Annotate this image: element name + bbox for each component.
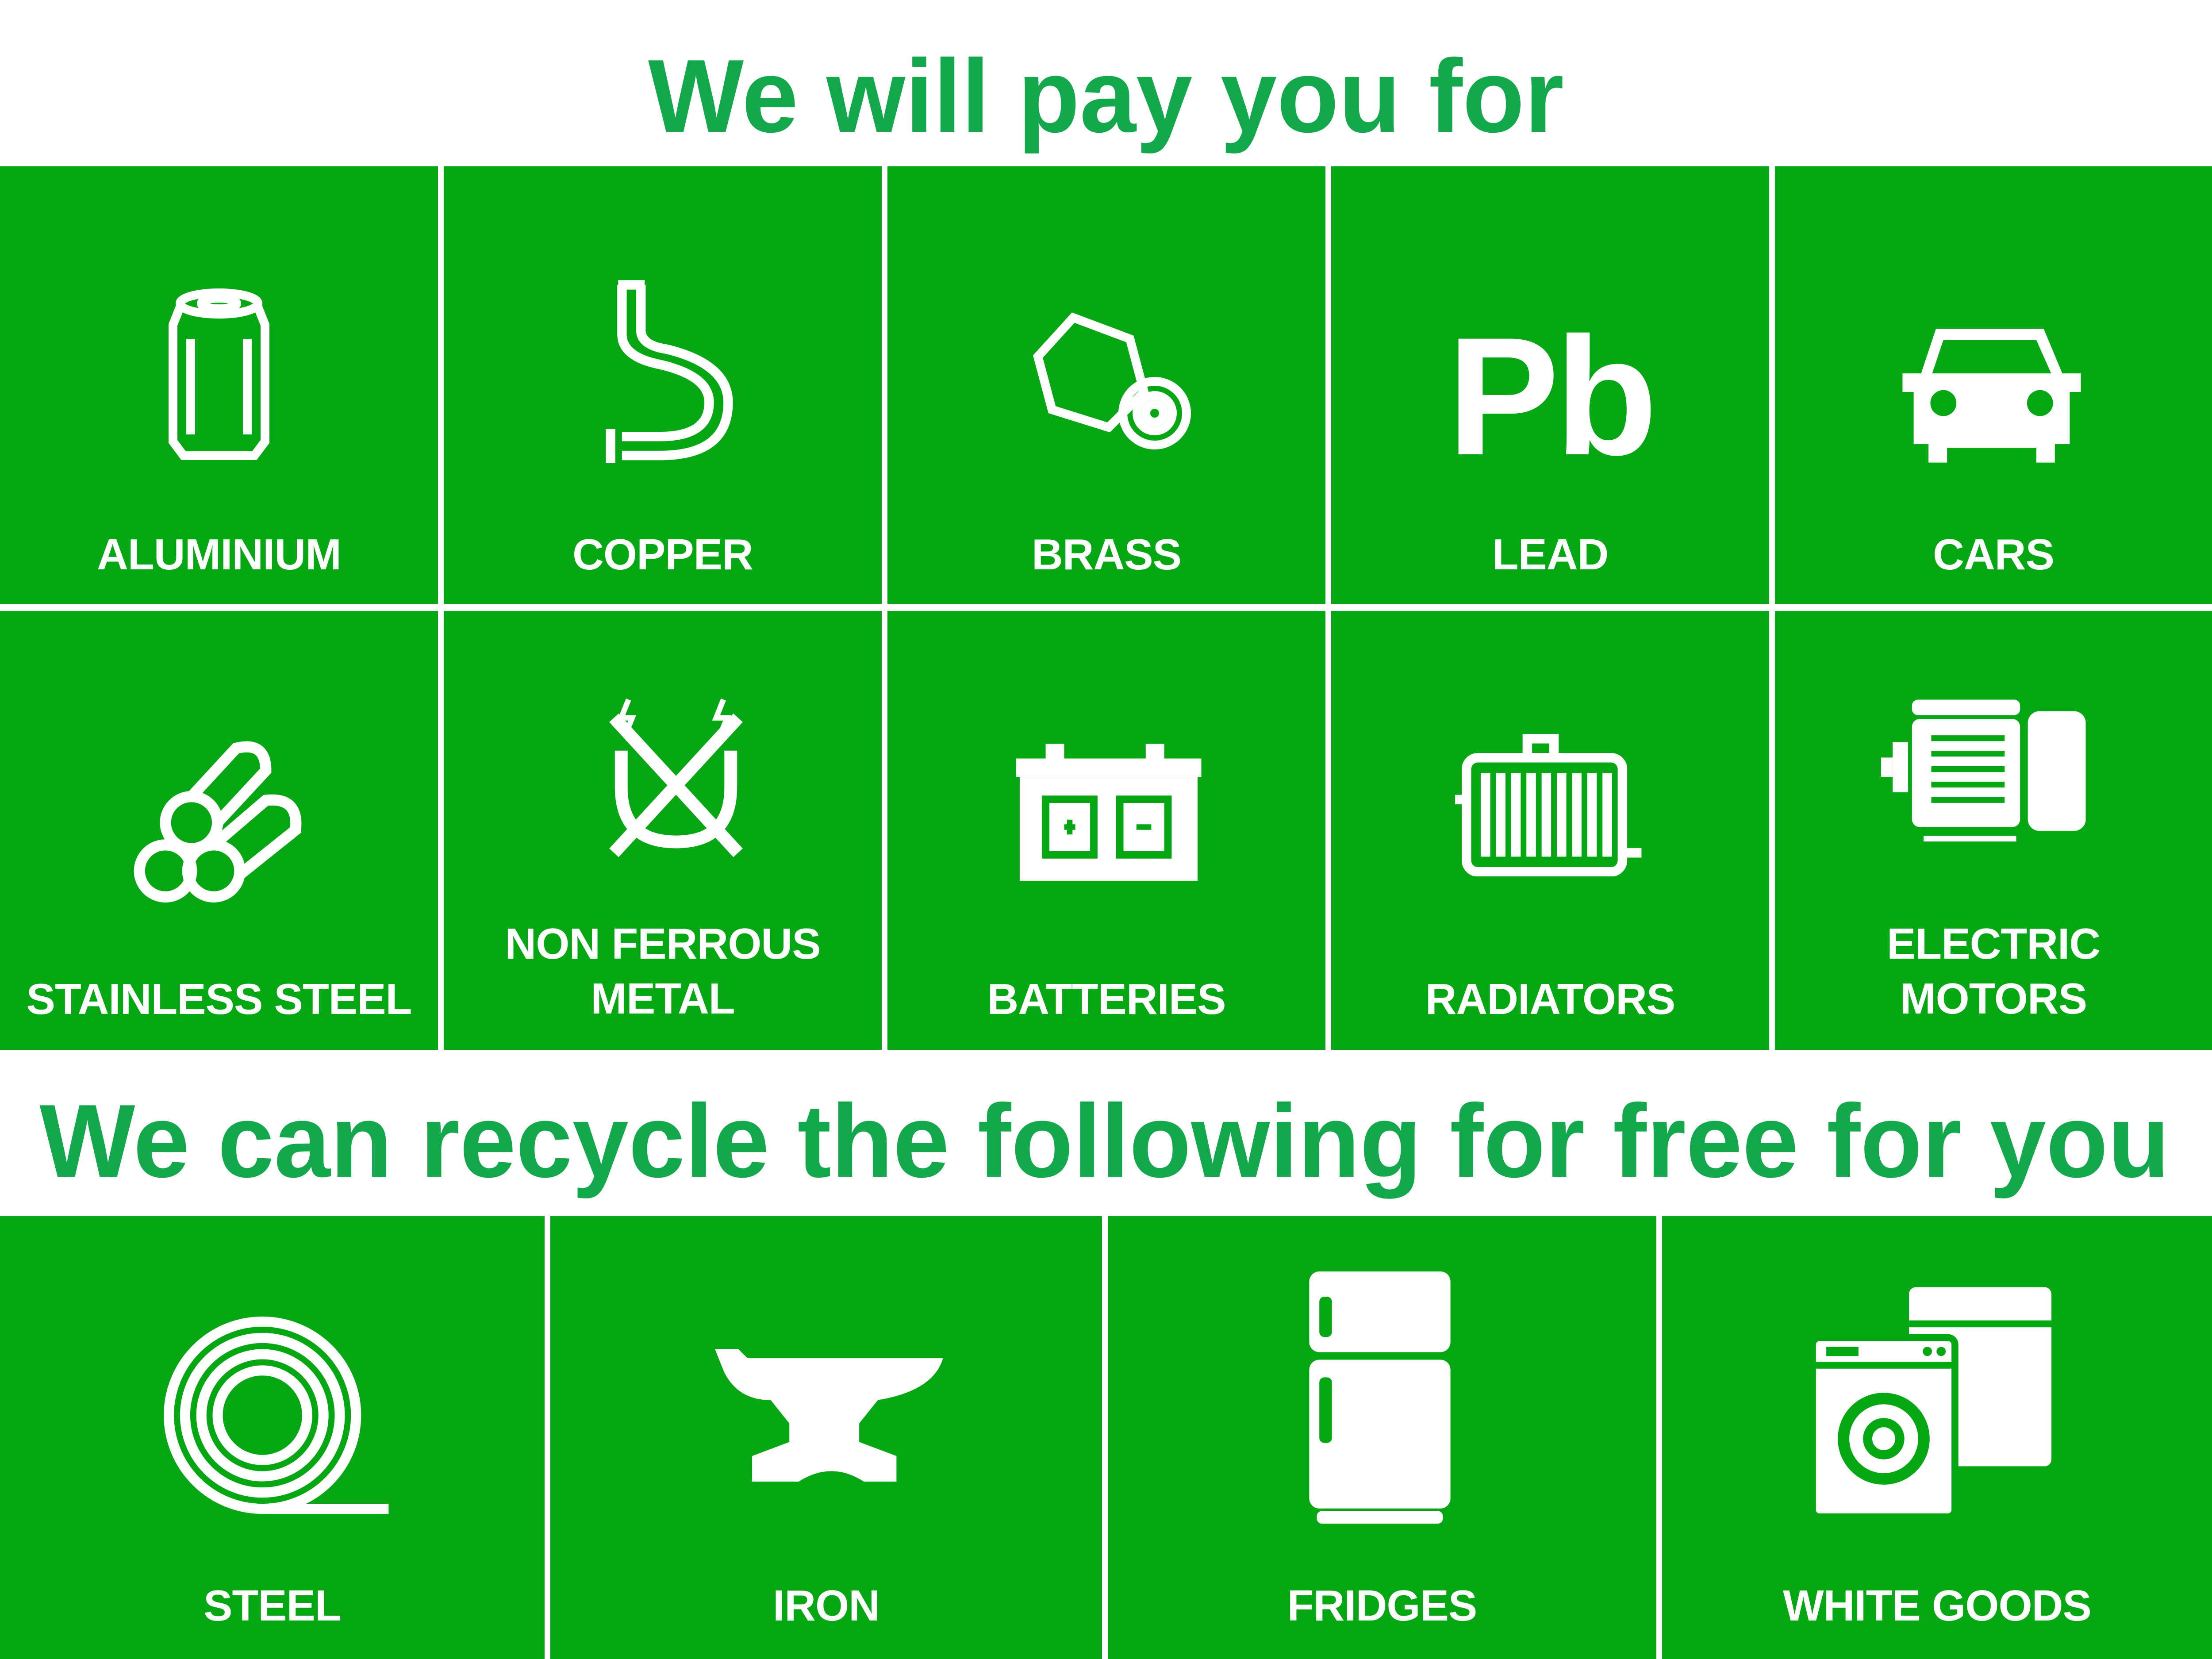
tile: electric motors: [1775, 611, 2212, 1050]
label: [1775, 916, 2212, 1026]
label: IRON: [773, 1581, 879, 1630]
icon: fitting: [1020, 303, 1197, 463]
label: RADIATORS: [1425, 975, 1675, 1023]
label: [444, 916, 882, 1026]
icon: tubes: [128, 726, 314, 912]
icon: radiator: [1455, 730, 1645, 876]
label: STEEL: [204, 1581, 341, 1630]
label: COPPER: [572, 530, 753, 579]
icon: crossed magnet: [603, 695, 749, 872]
icon: appliances: [1813, 1287, 2051, 1517]
label: BATTERIES: [987, 975, 1226, 1023]
icon: pipe: [603, 277, 736, 467]
tile: stainless steel: [0, 611, 438, 1050]
title: we will pay you for: We will pay you for: [648, 38, 1564, 154]
icon: anvil: [714, 1349, 949, 1482]
icon: coil: [164, 1313, 394, 1517]
tile: fridges: [1108, 1216, 1656, 1659]
tile: copper: [444, 166, 882, 604]
label: METAL: [591, 974, 735, 1023]
icon: battery: [1016, 744, 1202, 881]
tile: steel: [0, 1216, 545, 1659]
tile: white goods: [1662, 1216, 2212, 1659]
label: BRASS: [1032, 530, 1181, 579]
icon: Pb: Pb: [1447, 302, 1653, 490]
label: CARS: [1933, 530, 2054, 579]
label: ALUMINIUM: [97, 530, 341, 579]
icon: can: [148, 286, 290, 463]
icon: car: [1899, 317, 2085, 467]
tile: aluminium: [0, 166, 438, 604]
title: we can recycle: We can recycle the following for free for you: [40, 1083, 2170, 1199]
label: FRIDGES: [1287, 1581, 1477, 1630]
label: STAINLESS STEEL: [27, 975, 411, 1023]
tile: radiators: [1331, 611, 1769, 1050]
tile: iron: [550, 1216, 1102, 1659]
tile: cars: [1775, 166, 2212, 604]
icon: motor: [1881, 699, 2093, 854]
tile: non ferrous metal: [444, 611, 882, 1050]
label: NON FERROUS: [505, 919, 821, 968]
icon: fridge: [1309, 1271, 1451, 1524]
label: ELECTRIC: [1887, 919, 2100, 968]
label: WHITE GOODS: [1783, 1581, 2091, 1630]
label: LEAD: [1492, 530, 1608, 579]
tile: lead: [1331, 166, 1769, 604]
tile: batteries: [887, 611, 1325, 1050]
label: MOTORS: [1900, 974, 2087, 1023]
tile: brass: [887, 166, 1325, 604]
